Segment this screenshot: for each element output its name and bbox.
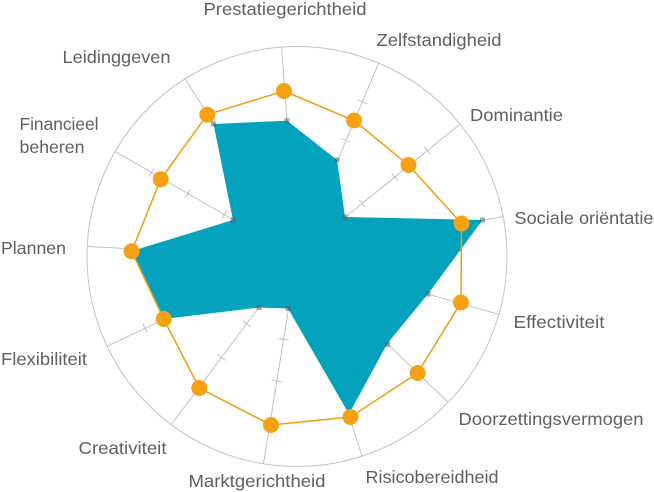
label: Doorzettingsvermogen: Doorzettingsvermogen [458, 409, 644, 429]
label: Dominantie: Dominantie [470, 105, 563, 125]
orange data line [132, 91, 461, 425]
label: Marktgerichtheid: Marktgerichtheid [188, 471, 326, 491]
label: Financieel beheren: beheren [20, 137, 84, 157]
label: Plannen: Plannen [1, 238, 66, 258]
small square vertex markers [211, 118, 485, 347]
label: Risicobereidheid: Risicobereidheid [366, 467, 498, 487]
label: Zelfstandigheid: Zelfstandigheid [376, 30, 502, 50]
orange data points [124, 83, 469, 433]
radial axes with tick marks [87, 47, 504, 465]
label: Effectiviteit: Effectiviteit [514, 312, 605, 332]
label: Sociale oriëntatie: Sociale oriëntatie [514, 208, 654, 228]
outer circle of the radar grid [87, 46, 507, 466]
label: Creativiteit: Creativiteit [78, 438, 167, 458]
label: Flexibiliteit: Flexibiliteit [1, 349, 87, 369]
teal data area [132, 121, 482, 414]
label: Leidinggeven: Leidinggeven [62, 47, 170, 67]
label: Financieel beheren: Financieel [20, 114, 98, 134]
